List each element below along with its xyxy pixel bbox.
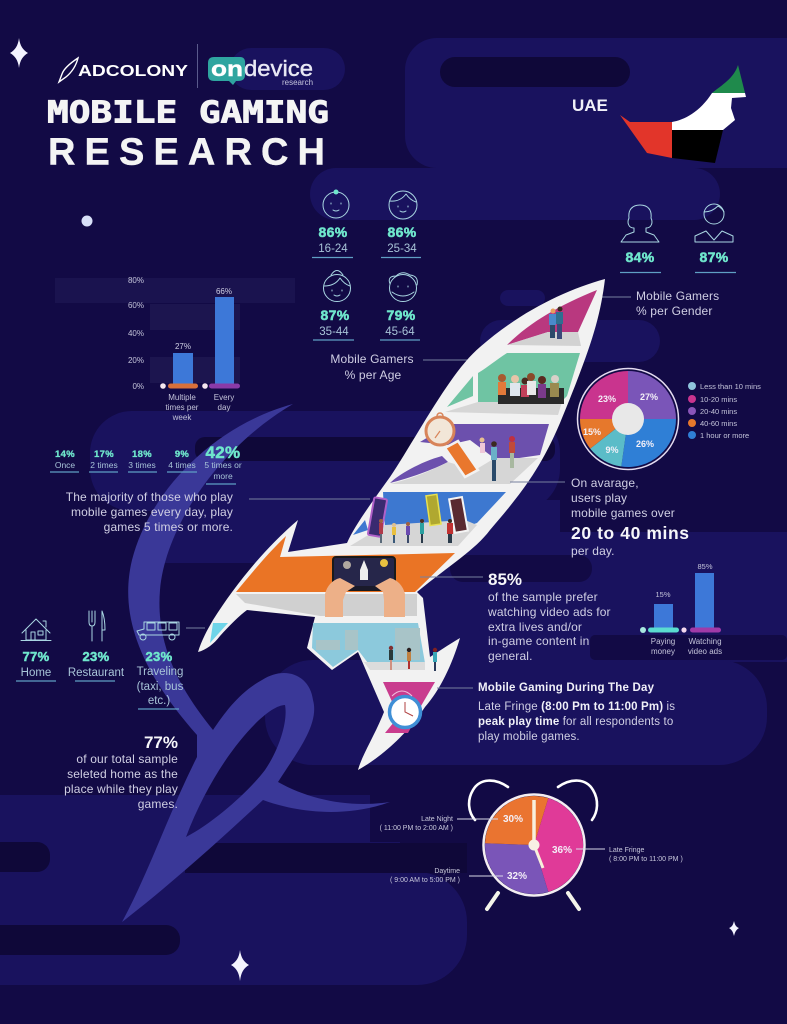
bar chart: play frequency: 0% xyxy=(132,382,144,391)
crescent and rocket trail silhouette xyxy=(122,404,390,922)
icon: young face xyxy=(389,191,417,219)
alarm clock pie chart: 32% xyxy=(507,871,527,882)
pie legend: 20-40 mins xyxy=(700,407,737,416)
video ads caption: extra lives and/or xyxy=(488,620,582,634)
age caption: Mobile Gamers xyxy=(330,352,414,366)
icon: stopwatch xyxy=(426,413,454,445)
label: late fringe xyxy=(576,847,683,863)
icon: woman xyxy=(621,205,659,242)
time spent caption xyxy=(510,476,689,558)
room: time spent xyxy=(390,413,549,484)
bar chart: play frequency: 80% xyxy=(128,276,144,285)
stat home: Home xyxy=(21,667,51,679)
bar chart: play frequency: 27% xyxy=(175,342,191,351)
room: travel city xyxy=(210,623,437,671)
gender caption xyxy=(590,289,719,318)
phone with rocket game and hands xyxy=(325,557,405,617)
logo: on device research: on xyxy=(211,58,243,81)
UAE label: UAE xyxy=(572,96,608,115)
UAE flag map xyxy=(620,65,746,163)
bar chart: play frequency: Every xyxy=(214,393,234,402)
bar chart: play frequency: day xyxy=(218,403,230,412)
frequency caption: mobile games every day, play xyxy=(71,505,233,519)
stat 35-44 xyxy=(313,307,354,340)
video ads caption: 85% xyxy=(488,570,522,589)
time spent pie chart: 9% xyxy=(605,445,619,455)
bar chart: video ads: 15% xyxy=(655,590,671,599)
stat 45-64: 79% xyxy=(387,307,416,323)
home caption xyxy=(64,733,178,811)
age group stats xyxy=(312,190,421,340)
pie legend: 1 hour or more xyxy=(700,431,749,440)
stat restaurant xyxy=(68,649,125,681)
stat home xyxy=(16,649,56,681)
bar chart: video ads: money xyxy=(651,647,675,656)
stat 35-44: 35-44 xyxy=(319,326,349,338)
logo: on device research: device xyxy=(244,56,313,81)
label: late fringe: Late Fringe xyxy=(609,847,645,854)
pie legend: 10-20 mins xyxy=(700,395,737,404)
home caption: place while they play xyxy=(64,782,178,796)
times played per day stats xyxy=(50,443,242,484)
gender caption: % per Gender xyxy=(636,304,713,318)
video ads caption: watching video ads for xyxy=(487,605,611,619)
home caption: of our total sample xyxy=(76,752,178,766)
stat restaurant: 23% xyxy=(83,649,110,664)
gender caption: Mobile Gamers xyxy=(636,289,719,303)
times played per day stats: 4 times xyxy=(168,460,196,470)
times played per day stats: 3 times xyxy=(128,460,156,470)
stat traveling: (taxi, bus xyxy=(137,681,184,693)
time spent pie chart: 27% xyxy=(640,392,658,402)
time spent pie chart xyxy=(578,368,678,470)
time spent caption: 20 to 40 mins xyxy=(571,523,689,543)
label: late night: ( 11:00 PM to 2:00 AM ) xyxy=(380,825,453,832)
title: MOBILE GAMING xyxy=(47,96,329,130)
times played per day stats: 42% xyxy=(206,443,240,462)
room: age group family xyxy=(445,353,580,415)
stat male: 87% xyxy=(700,249,729,265)
time spent caption: users play xyxy=(571,491,627,505)
logo: AdColony: ADCOLONY xyxy=(78,63,189,80)
bar chart: play frequency: 40% xyxy=(128,329,144,338)
label: late fringe: ( 8:00 PM to 11:00 PM ) xyxy=(609,856,683,863)
times played per day stats: 2 times xyxy=(90,460,118,470)
stat 25-34: 25-34 xyxy=(387,243,417,255)
icon: house xyxy=(21,619,51,640)
bar chart: play frequency: 20% xyxy=(128,356,144,365)
travel connector xyxy=(186,627,205,629)
video ads caption: of the sample prefer xyxy=(488,590,598,604)
stat home: 77% xyxy=(23,649,50,664)
gender stats xyxy=(620,204,736,272)
mobile gaming during the day caption: Late Fringe (8:00 Pm to 11:00 Pm) is xyxy=(478,701,675,713)
mobile gaming during the day caption: peak play time for all respondents to xyxy=(478,716,673,728)
stat traveling: etc.) xyxy=(148,695,170,707)
pie legend xyxy=(688,382,761,440)
mobile gaming during the day caption: Mobile Gaming During The Day xyxy=(478,682,655,694)
stat 25-34 xyxy=(381,224,421,258)
stat 25-34: 86% xyxy=(388,224,417,240)
age caption xyxy=(330,352,500,382)
rocket xyxy=(198,279,605,770)
logo divider xyxy=(197,44,198,88)
video ads caption xyxy=(420,570,611,663)
times played per day stats: Once xyxy=(55,460,75,470)
stat 16-24 xyxy=(312,224,353,258)
bar chart: video ads: video ads xyxy=(688,647,722,656)
times played per day stats: 14% xyxy=(55,449,75,460)
label: late night xyxy=(380,816,498,832)
icon: bearded man face xyxy=(389,273,417,302)
time spent pie chart: 26% xyxy=(636,439,654,449)
logo: on device research: research xyxy=(282,78,313,87)
bar chart: play frequency: 60% xyxy=(128,301,144,310)
mobile gaming during the day caption: play mobile games. xyxy=(478,731,580,743)
frequency caption xyxy=(66,490,370,534)
icon: fork and knife xyxy=(89,611,105,641)
time spent pie chart: 15% xyxy=(583,427,601,437)
stat traveling: 23% xyxy=(146,649,173,664)
pie legend: Less than 10 mins xyxy=(700,382,761,391)
stat 16-24: 16-24 xyxy=(318,243,348,255)
bar chart: play frequency xyxy=(128,276,240,422)
stat restaurant: Restaurant xyxy=(68,667,125,679)
room: gender xyxy=(507,290,597,346)
video ads caption: general. xyxy=(488,649,533,663)
label: daytime: ( 9:00 AM to 5:00 PM ) xyxy=(390,877,460,884)
alarm clock pie chart xyxy=(469,781,597,909)
bar chart: video ads xyxy=(640,562,722,656)
stat 16-24: 86% xyxy=(319,224,348,240)
times played per day stats: more xyxy=(213,471,233,481)
stat traveling xyxy=(137,649,184,709)
bar chart: play frequency: 66% xyxy=(216,287,232,296)
frequency caption: The majority of those who play xyxy=(66,490,233,504)
bar chart: video ads: Watching xyxy=(688,637,722,646)
home caption: 77% xyxy=(144,733,178,752)
rocket body xyxy=(198,279,605,770)
stat 45-64: 45-64 xyxy=(385,326,415,338)
times played per day stats: 17% xyxy=(94,449,114,460)
label: daytime xyxy=(390,868,503,884)
times played per day stats: 9% xyxy=(175,449,189,460)
times played per day stats: 18% xyxy=(132,449,152,460)
bar chart: play frequency: Multiple xyxy=(168,393,196,402)
logo: AdColony xyxy=(59,58,189,82)
bar chart: play frequency: times per xyxy=(166,403,199,412)
time spent caption: mobile games over xyxy=(571,506,675,520)
bar chart: video ads: Paying xyxy=(651,637,675,646)
age caption: % per Age xyxy=(345,368,402,382)
icon: man in suit xyxy=(695,204,733,242)
room: phone ads xyxy=(236,536,455,617)
icon: bus xyxy=(137,622,179,640)
logo: on device research xyxy=(208,56,313,87)
alarm clock pie chart: 30% xyxy=(503,814,523,825)
stat 35-44: 87% xyxy=(321,307,350,323)
pie legend: 40-60 mins xyxy=(700,419,737,428)
time spent caption: On avarage, xyxy=(571,476,639,490)
label: late night: Late Night xyxy=(421,816,453,823)
home caption: games. xyxy=(138,797,178,811)
stat 45-64 xyxy=(380,307,420,340)
title: RESEARCH xyxy=(48,132,325,174)
room: daytime alarm clock xyxy=(383,682,435,733)
bar chart: play frequency: week xyxy=(172,413,192,422)
mobile gaming during the day caption xyxy=(437,682,675,743)
home caption: seleted home as the xyxy=(67,767,178,781)
stat traveling: Traveling xyxy=(137,666,183,678)
icon: older woman face xyxy=(324,270,350,302)
time spent caption: per day. xyxy=(571,544,615,558)
alarm clock pie chart: 36% xyxy=(552,845,572,856)
stat female: 84% xyxy=(626,249,655,265)
room: game screens xyxy=(350,492,506,546)
frequency caption: games 5 times or more. xyxy=(104,520,233,534)
icon: baby face xyxy=(323,190,349,218)
title xyxy=(47,96,329,174)
video ads caption: in-game content in xyxy=(488,634,589,648)
label: daytime: Daytime xyxy=(434,868,460,875)
bar chart: video ads: 85% xyxy=(697,562,713,571)
places stats xyxy=(16,611,184,709)
times played per day stats: 5 times or xyxy=(204,460,242,470)
time spent pie chart: 23% xyxy=(598,394,616,404)
